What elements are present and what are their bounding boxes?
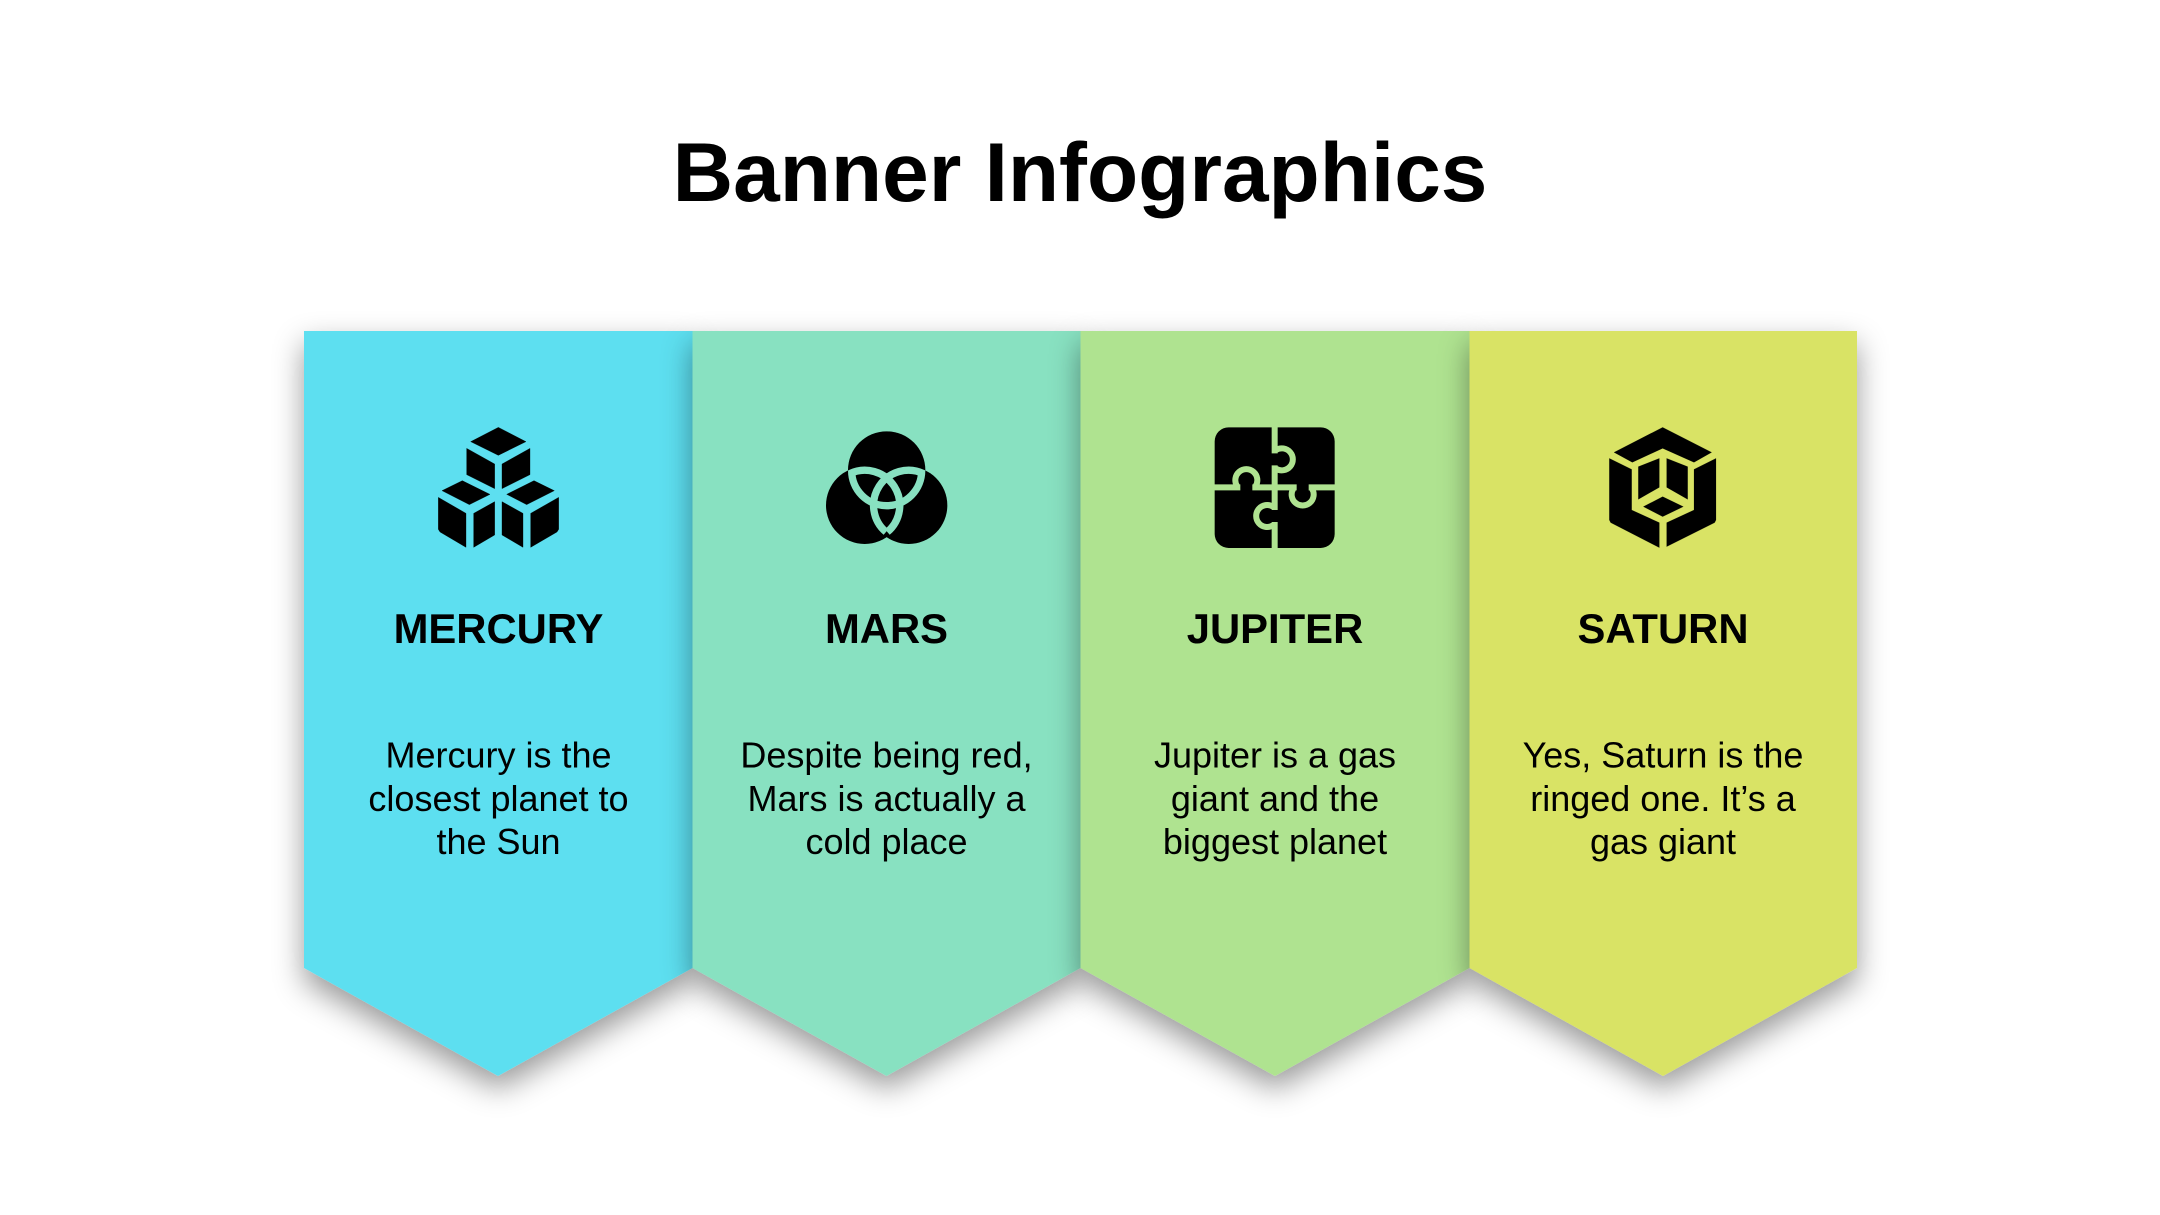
description: Jupiter: Jupiter is a gas — [1154, 734, 1396, 776]
heading: Mercury: MERCURY — [394, 605, 603, 652]
icon: overlapping circles — [826, 431, 947, 544]
panel: Jupiter — [1080, 331, 1470, 1076]
title: Banner Infographics — [673, 125, 1487, 219]
description: Saturn: Yes, Saturn is the — [1523, 734, 1803, 776]
banner shape: Saturn — [1470, 331, 1857, 1076]
panel: Mars — [692, 331, 1080, 1076]
description: Mars: cold place — [805, 821, 968, 862]
heading: Mars: MARS — [825, 605, 948, 652]
description: Mercury: closest planet to — [368, 778, 629, 819]
description: Mars: Despite being red, — [740, 734, 1033, 776]
heading: Saturn: SATURN — [1577, 605, 1749, 652]
heading: Jupiter: JUPITER — [1187, 605, 1363, 652]
panel: Saturn — [1470, 331, 1857, 1076]
icon: puzzle — [1211, 423, 1339, 552]
description: Jupiter: biggest planet — [1163, 821, 1387, 862]
description: Mars: Mars is actually a — [747, 778, 1027, 819]
description: Mercury: the Sun — [436, 821, 561, 862]
icon: stacked cubes — [438, 427, 559, 547]
description: Saturn: gas giant — [1590, 821, 1736, 862]
description: Jupiter: giant and the — [1171, 778, 1379, 819]
panel: Mercury — [304, 331, 692, 1076]
banner shape: Jupiter — [1080, 331, 1470, 1076]
banner shape: Mercury — [304, 331, 692, 1076]
description: Saturn: ringed one. It’s a — [1530, 778, 1797, 819]
banner shape: Mars — [692, 331, 1080, 1076]
icon: hexagonal cube — [1609, 427, 1716, 548]
description: Mercury: Mercury is the — [385, 734, 612, 776]
